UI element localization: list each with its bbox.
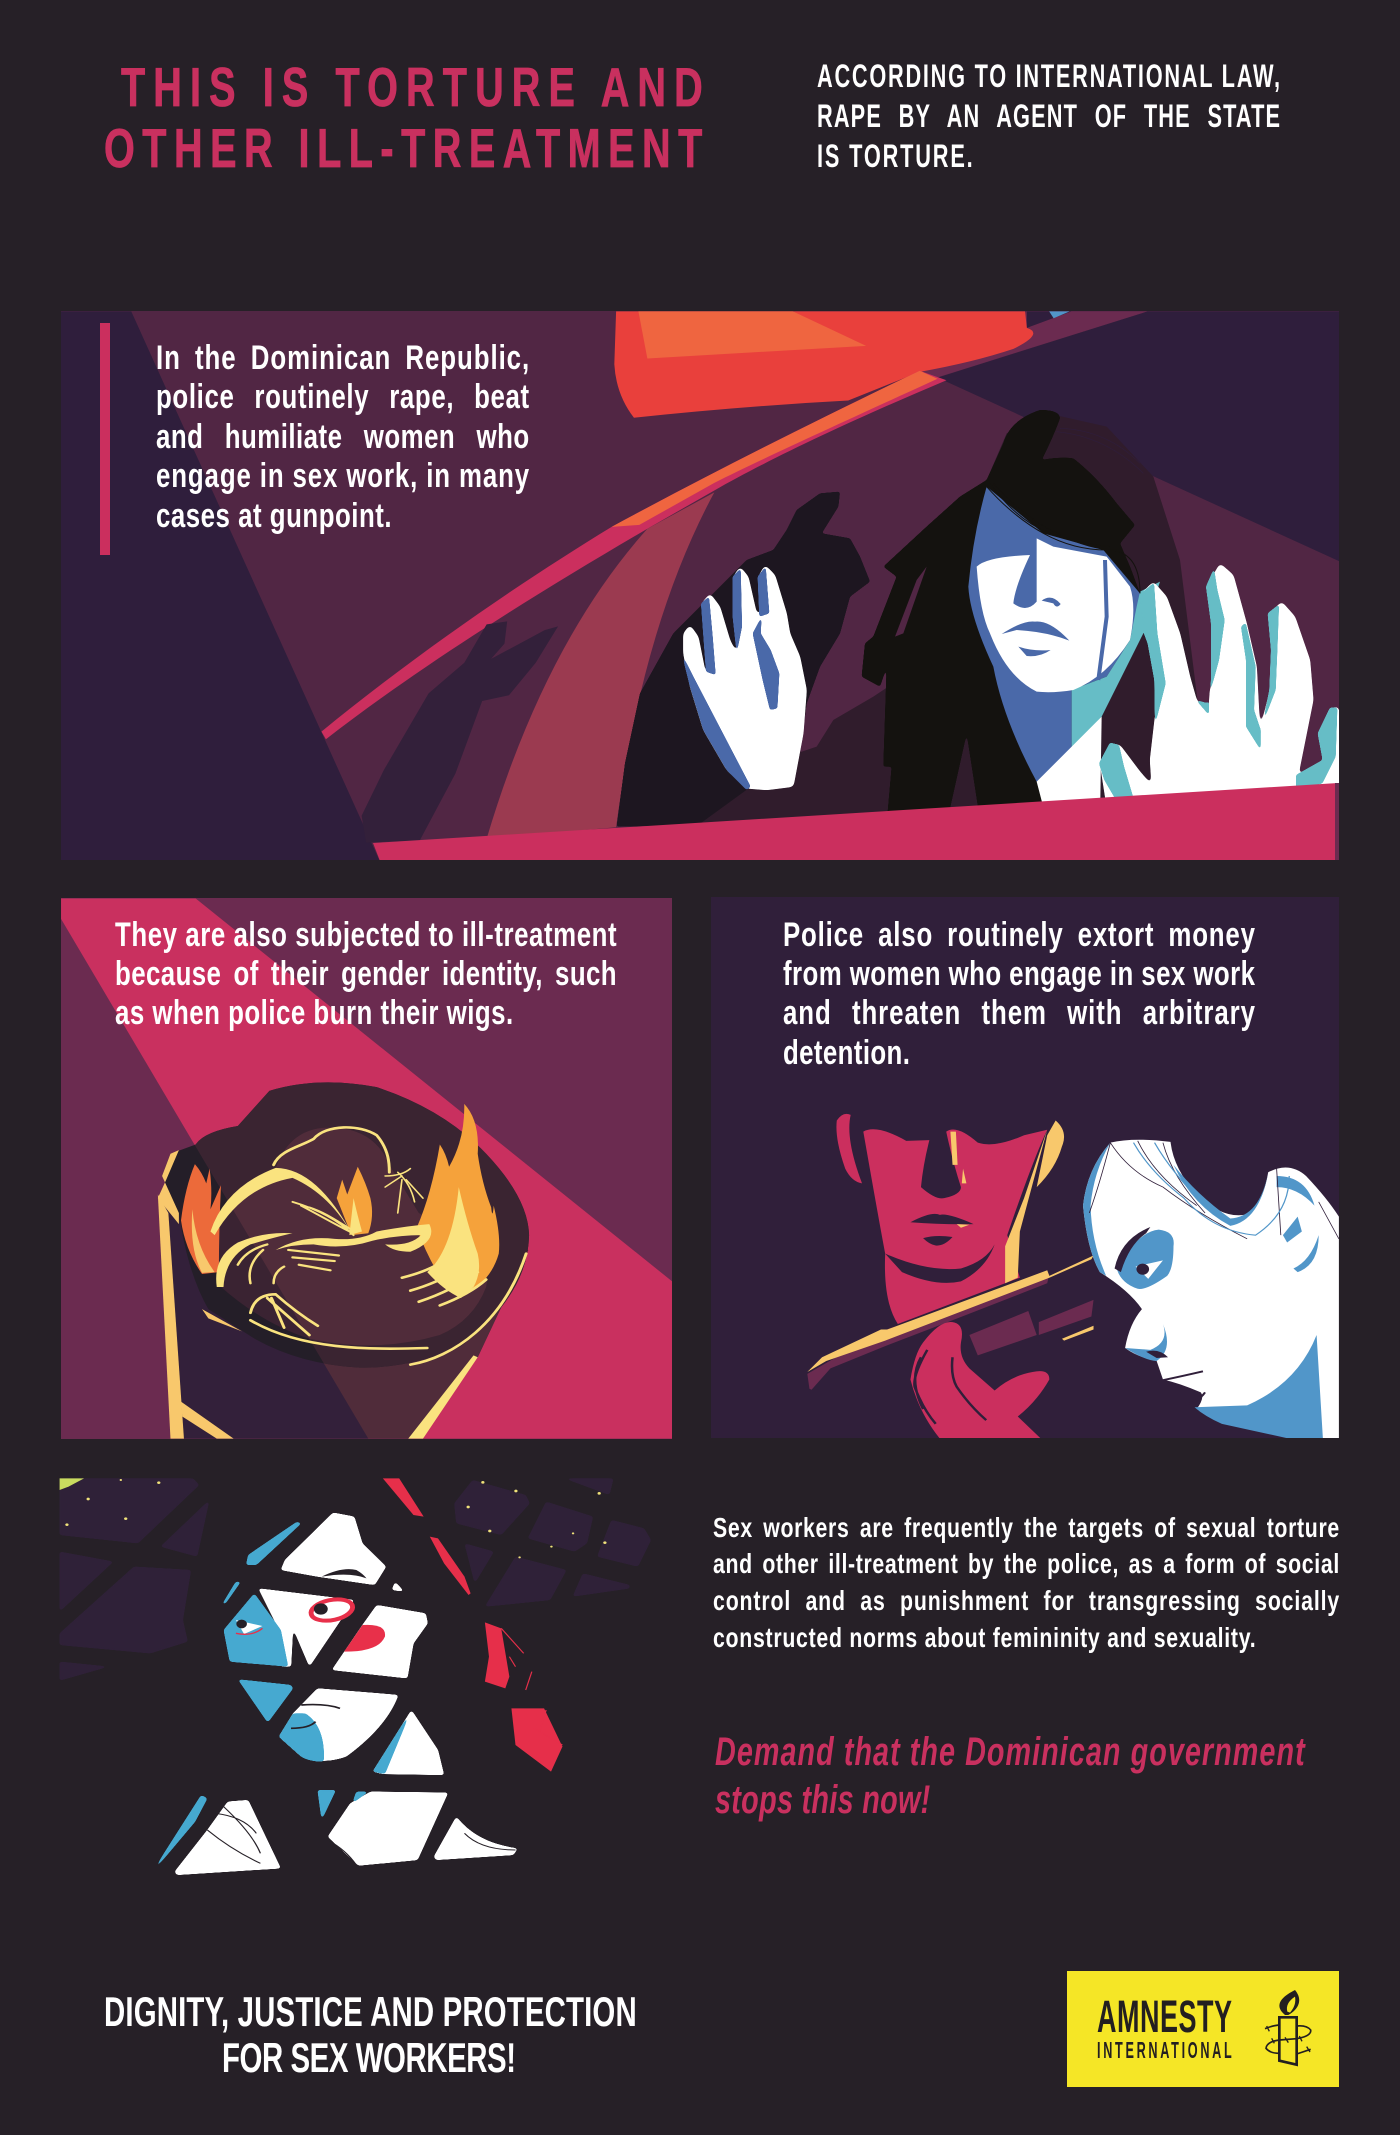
illustration: face behind bars <box>60 1478 651 1875</box>
accent bar <box>100 323 110 555</box>
intro statement: RAPE BY AN AGENT OF THE STATE <box>817 98 1280 134</box>
icon: candle in barbed wire <box>1265 1990 1311 2065</box>
icon: right hand <box>1099 563 1347 807</box>
icon: left flame <box>181 1164 221 1274</box>
title: OTHER ILL-TREATMENT <box>104 119 702 180</box>
text block: extortion <box>783 917 1255 1072</box>
illustration: police officer <box>836 1114 1064 1324</box>
illustration: foreground floor <box>373 783 1339 861</box>
text block: Dominican Republic: cases at gunpoint. <box>156 498 392 535</box>
text block: gender identity: They are also subjected to ill-treatment <box>115 917 617 954</box>
intro statement <box>817 58 1280 174</box>
text block: extortion: Police also routinely extort money <box>783 917 1255 954</box>
red hair shards <box>383 1478 562 1772</box>
call to action: Demand that the Dominican government <box>715 1729 1306 1774</box>
text block: social control: Sex workers are frequently the targets of sexual torture <box>713 1512 1339 1544</box>
text block: Dominican Republic: and humiliate women who <box>156 419 529 456</box>
illustration: officer's hand <box>910 1322 1049 1439</box>
night sky through bars <box>60 1478 651 1681</box>
panel: burning wig <box>61 898 672 1439</box>
title: THIS IS TORTURE AND <box>121 58 703 119</box>
footer slogan <box>104 1988 637 2081</box>
icon: centre flame <box>337 1167 372 1235</box>
text block: Dominican Republic: engage in sex work, in many <box>156 458 529 495</box>
text block: Dominican Republic <box>156 340 529 535</box>
text block: extortion: detention. <box>783 1035 910 1072</box>
footer slogan: FOR SEX WORKERS! <box>222 2034 517 2081</box>
text block: social control <box>713 1512 1339 1654</box>
text block: Dominican Republic: In the Dominican Republic, <box>156 340 529 377</box>
text block: gender identity: because of their gender identity, such <box>115 956 617 993</box>
text block: Dominican Republic: police routinely rape, beat <box>156 379 529 416</box>
wig strands <box>210 1127 526 1365</box>
icon: right flame <box>417 1104 499 1298</box>
logo: Amnesty International <box>1067 1971 1339 2087</box>
text block: gender identity <box>115 917 617 1032</box>
text block: extortion: and threaten them with arbitrary <box>783 995 1255 1032</box>
face shards <box>150 1513 518 1875</box>
text block: extortion: from women who engage in sex work <box>783 956 1255 993</box>
intro statement: ACCORDING TO INTERNATIONAL LAW, <box>817 58 1280 94</box>
text block: gender identity: as when police burn their wigs. <box>115 995 513 1032</box>
panel: police and hands raised <box>61 311 1347 861</box>
logo: Amnesty International: INTERNATIONAL <box>1097 2037 1232 2063</box>
text block: social control: and other ill-treatment by the police, as a form of social <box>713 1548 1339 1580</box>
icon: left hand <box>682 565 807 790</box>
intro statement: IS TORTURE. <box>817 138 973 174</box>
text block: social control: constructed norms about femininity and sexuality. <box>713 1622 1256 1654</box>
illustration: woman's face <box>1083 1140 1339 1439</box>
call to action <box>715 1729 1306 1822</box>
illustration: spotlight <box>61 898 672 1439</box>
illustration: light beams <box>61 311 1339 861</box>
illustration: woman and police shadows <box>617 410 1203 833</box>
footer slogan: DIGNITY, JUSTICE AND PROTECTION <box>104 1988 637 2035</box>
illustration: gun <box>807 1256 1094 1390</box>
call to action: stops this now! <box>715 1777 930 1822</box>
illustration: wig on stand with flames <box>158 1082 529 1439</box>
logo: Amnesty International: AMNESTY <box>1097 1991 1232 2042</box>
text block: social control: control and as punishment for transgressing socially <box>713 1585 1339 1617</box>
title <box>104 58 703 180</box>
panel: gun to the head <box>711 897 1339 1439</box>
